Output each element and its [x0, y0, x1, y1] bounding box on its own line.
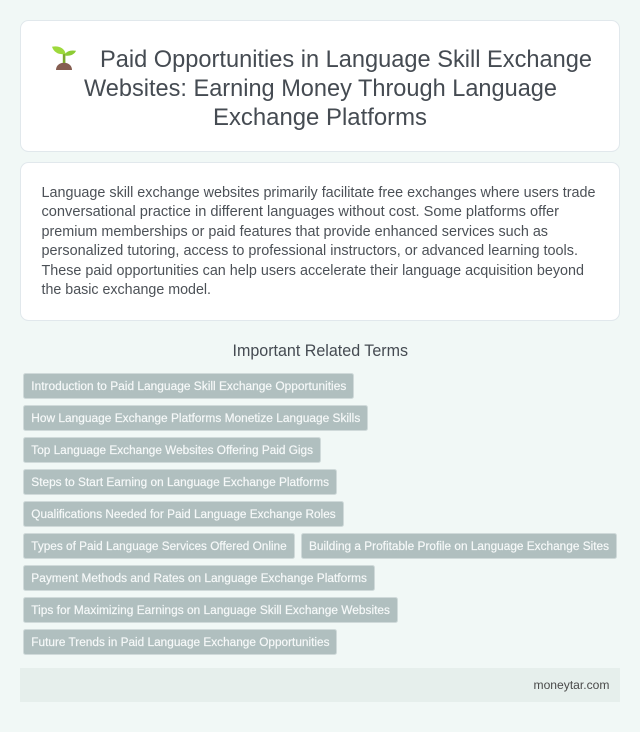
tag list [24, 374, 616, 654]
tag 4: Steps to Start Earning on Language Exchange Platforms [31, 475, 329, 489]
tag 8 [24, 566, 374, 590]
title: Websites: Earning Money Through Language [84, 75, 557, 102]
tag 7 [302, 534, 616, 558]
footer [20, 668, 620, 702]
panel: title card [20, 20, 620, 152]
tag 9: Tips for Maximizing Earnings on Language Skill Exchange Websites [31, 603, 390, 617]
tag 7: Building a Profitable Profile on Language Exchange Sites [309, 539, 609, 553]
tag 6 [24, 534, 294, 558]
description text: personalized tutoring, access to professional instructors, or advanced learning tools. [42, 243, 578, 259]
title: Exchange Platforms [213, 104, 427, 131]
footer source: moneytar.com [534, 678, 610, 692]
tag 5: Qualifications Needed for Paid Language Exchange Roles [31, 507, 336, 521]
tag 1: Introduction to Paid Language Skill Exchange Opportunities [31, 379, 346, 393]
tag 3: Top Language Exchange Websites Offering Paid Gigs [31, 443, 313, 457]
tag 2: How Language Exchange Platforms Monetize Language Skills [31, 411, 360, 425]
tag 4 [24, 470, 336, 494]
tag 5 [24, 502, 344, 526]
description text [42, 185, 596, 298]
icon: seedling [52, 46, 76, 70]
title [84, 46, 592, 131]
tag 10: Future Trends in Paid Language Exchange Opportunities [31, 635, 330, 649]
tag 6: Types of Paid Language Services Offered Online [31, 539, 287, 553]
heading: important related terms: Important Related Terms [232, 342, 408, 360]
description text: Language skill exchange websites primarily facilitate free exchanges where users trade [42, 185, 596, 201]
description text: conversational practice in different languages without cost. Some platforms offer [42, 204, 559, 220]
description text: premium memberships or paid features that provide enhanced services such as [42, 224, 548, 240]
tag 1 [24, 374, 354, 398]
tag 8: Payment Methods and Rates on Language Exchange Platforms [31, 571, 367, 585]
tag 10 [24, 630, 336, 654]
description text: These paid opportunities can help users accelerate their language acquisition beyond [42, 263, 584, 279]
description text: the basic exchange model. [42, 282, 211, 298]
tag 9 [24, 598, 398, 622]
title: Paid Opportunities in Language Skill Exchange [100, 46, 592, 73]
tag 3 [24, 438, 320, 462]
panel: description card [20, 162, 620, 320]
tag 2 [24, 406, 368, 430]
